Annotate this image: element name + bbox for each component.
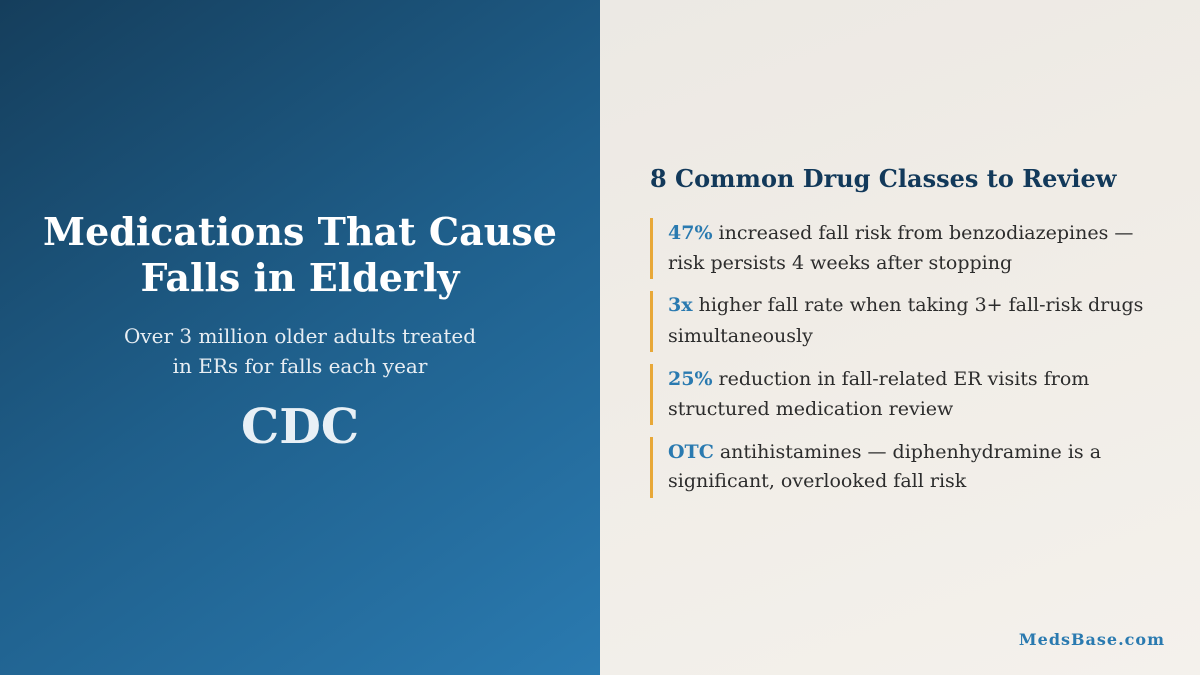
stat item: OTC: OTC antihistamines — diphenhydramine is a [668, 441, 1101, 463]
stat item: 3x [650, 291, 1180, 352]
brand: MedsBase.com: MedsBase.com [1019, 630, 1165, 649]
panel: right list [600, 0, 1200, 675]
subtitle [124, 324, 476, 378]
source: CDC: CDC [241, 399, 359, 455]
stat item: 47% [650, 218, 1180, 279]
stat item: 25%: 25% reduction in fall-related ER visits from [668, 368, 1089, 390]
subtitle: in ERs for falls each year [173, 354, 427, 378]
stat item: OTC [650, 437, 1180, 498]
stat item: 47%: risk persists 4 weeks after stopping [668, 252, 1012, 274]
stat item: OTC: significant, overlooked fall risk [668, 470, 966, 492]
stat item: 3x: simultaneously [668, 325, 813, 347]
title: Medications That Cause [43, 209, 557, 254]
title [43, 209, 557, 300]
title: Falls in Elderly [140, 255, 460, 300]
section heading: 8 Common Drug Classes to Review [650, 164, 1116, 193]
panel: left hero [0, 0, 600, 675]
stat item: 47%: 47% increased fall risk from benzodiazepines — [668, 222, 1133, 244]
subtitle: Over 3 million older adults treated [124, 324, 476, 348]
stat item: 3x: 3x higher fall rate when taking 3+ fall-risk drugs [668, 294, 1143, 316]
stat item: 25%: structured medication review [668, 398, 953, 420]
stat item: 25% [650, 364, 1180, 425]
